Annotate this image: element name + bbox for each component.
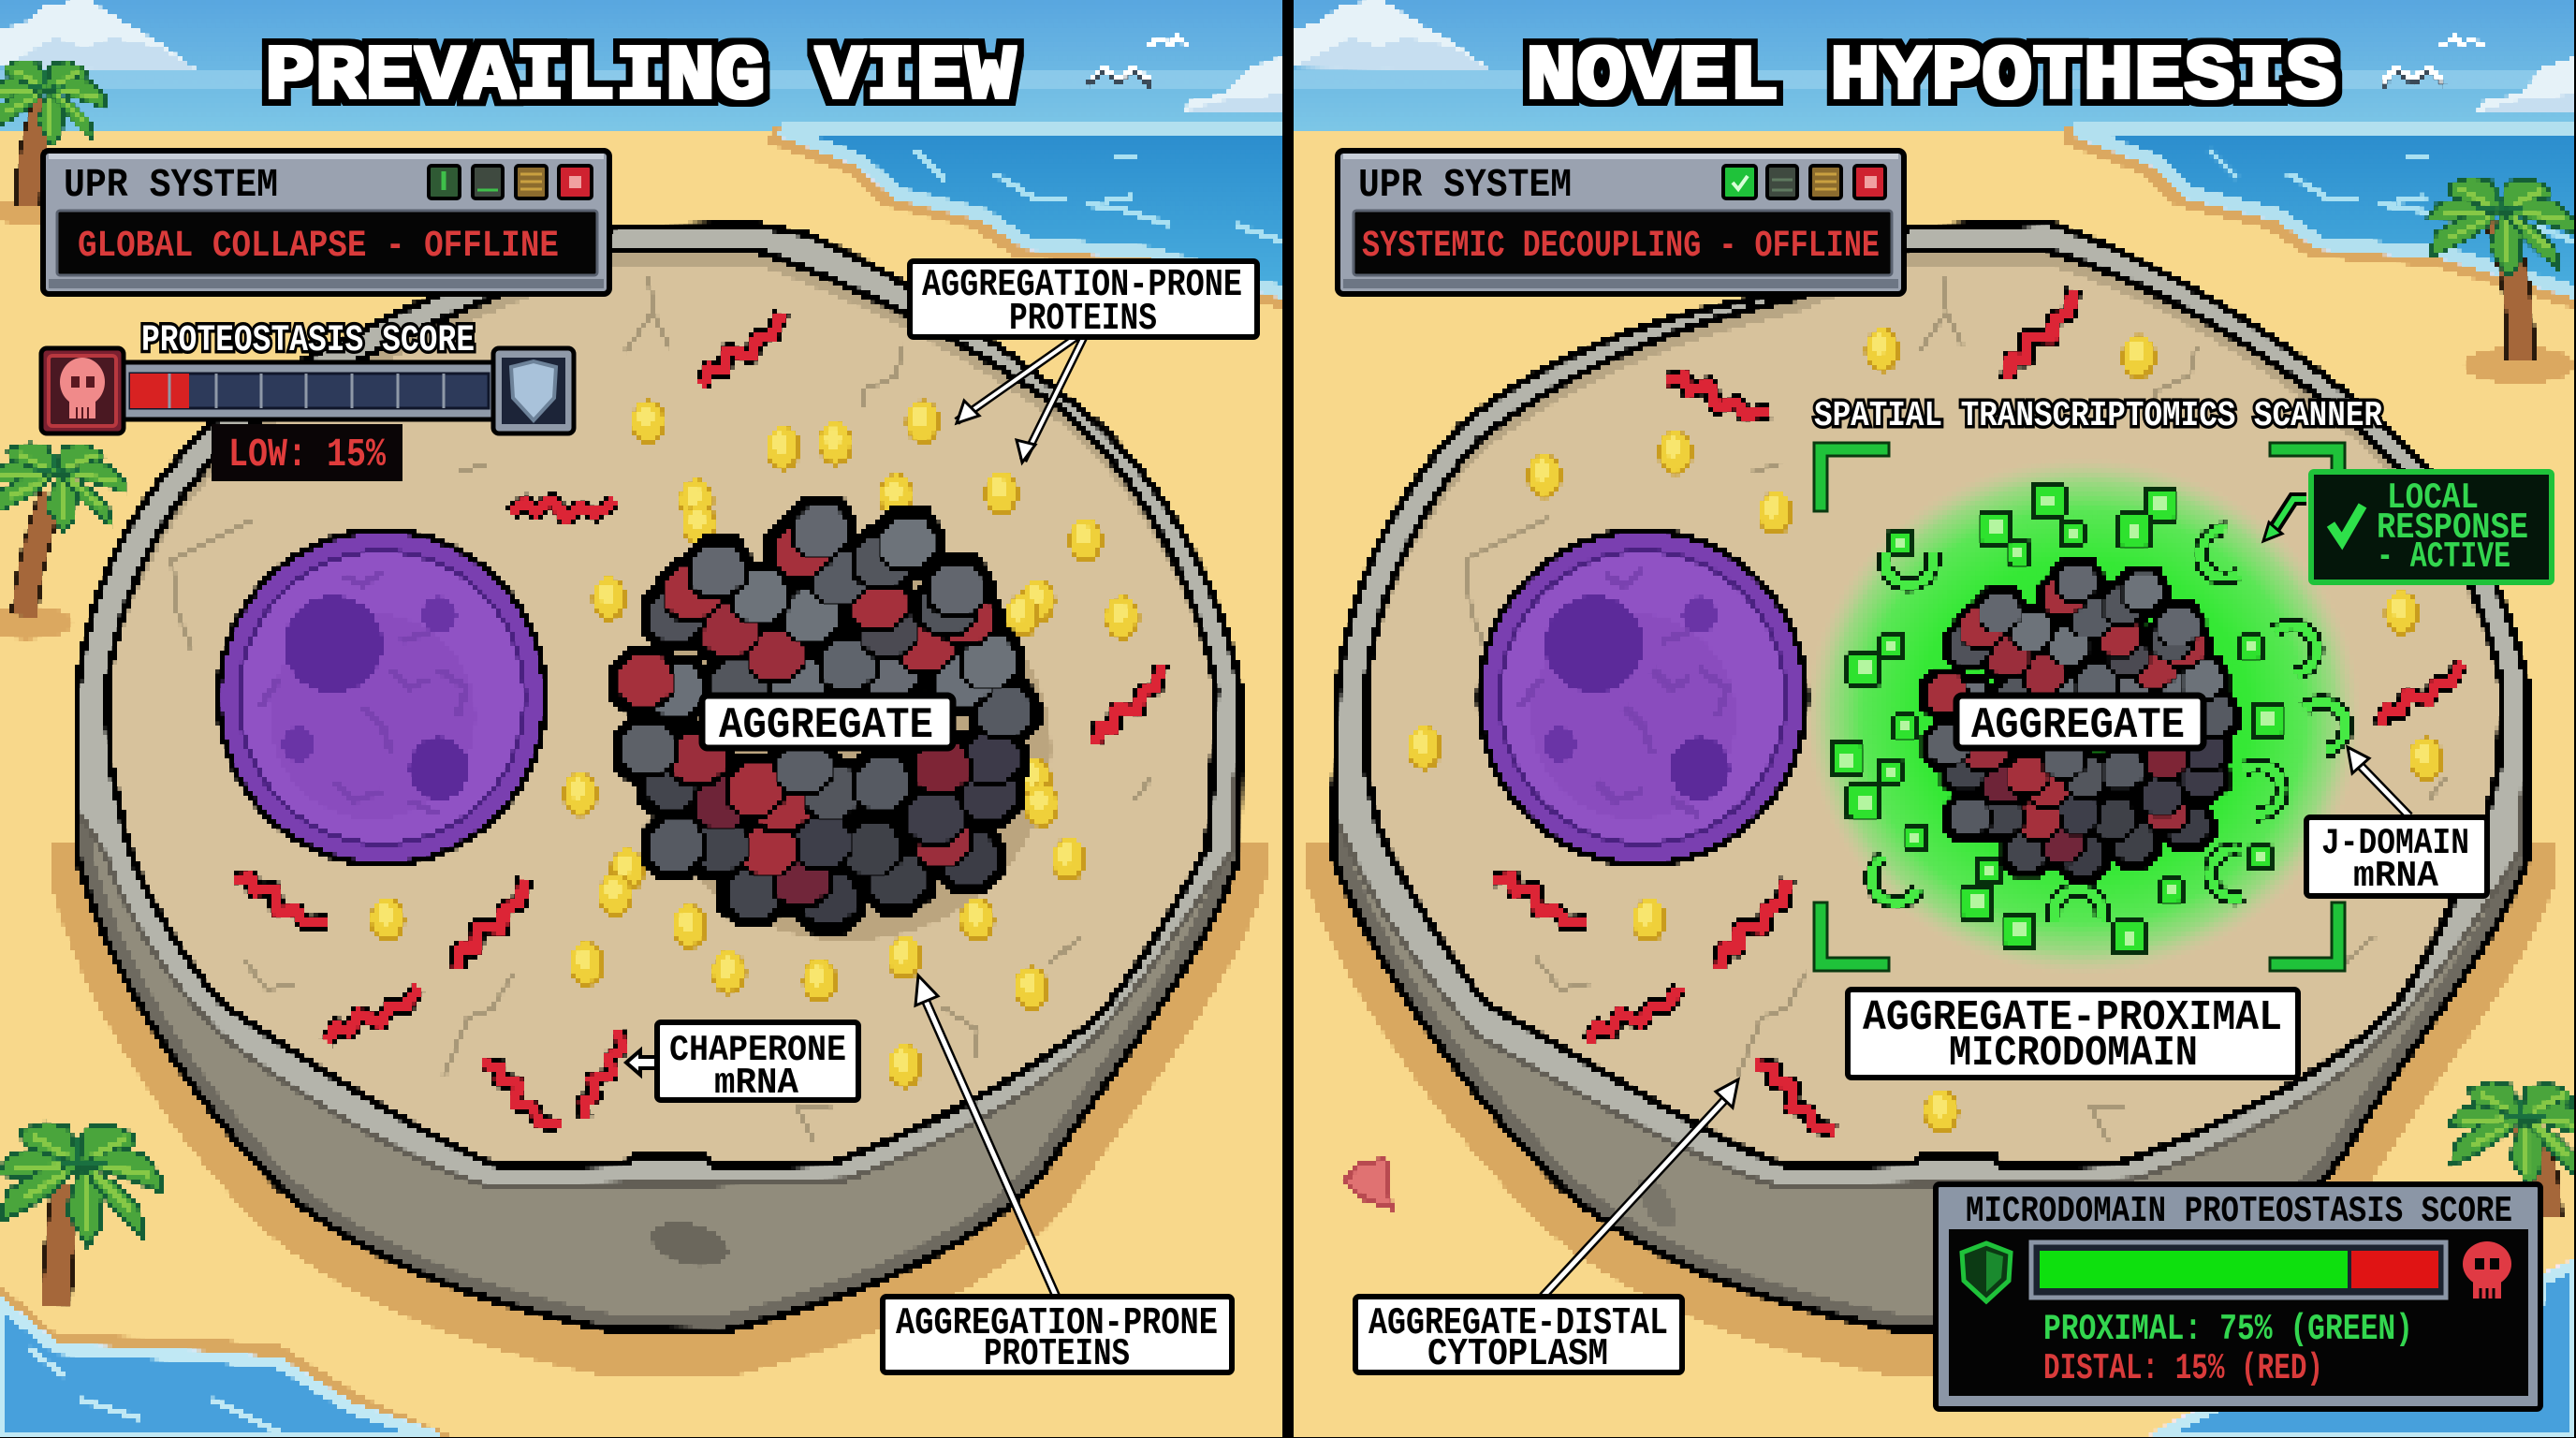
right cell: rock edge shading [1339,833,2523,1325]
callout: aggregate-distal cytoplasm: AGGREGATE-DISTAL [1368,1302,1668,1345]
right cell: cracks [1466,275,2445,1141]
right cell: cytoplasm highlight [1366,265,2502,1181]
left cell: rock edge shading [80,824,1236,1329]
callout: aggregation-prone proteins (top): AGGREGATION-PRONE [922,264,1242,307]
status message: SYSTEMIC DECOUPLING - OFFLINE [1362,226,1880,268]
icon: red skull [2463,1241,2511,1299]
callout: aggregate-proximal microdomain: MICRODOMAIN [1949,1030,2198,1078]
right UPR system panel [1338,151,1904,294]
palm tree middle left [0,443,127,639]
left cell: inner outline [107,250,1216,1167]
right cell: rock base [1333,223,2528,1331]
callout: aggregate-proximal microdomain [1848,990,2298,1078]
right cell: inner outline [1366,250,2502,1167]
callout: chaperone mRNA: CHAPERONE [669,1030,846,1071]
palm tree bottom left [0,1123,162,1308]
left cell: protein aggregate [618,505,1032,925]
callout: local response active: - ACTIVE [2377,536,2510,578]
icon: check mark [2331,506,2363,541]
left cell: crater on rock [647,1214,733,1274]
right cell: green local proteins [1831,484,2284,954]
heading: UPR SYSTEM [64,162,278,208]
callout: aggregation-prone proteins (bottom): AGGREGATION-PRONE [896,1302,1218,1345]
legend: distal: DISTAL: 15% (RED) [2043,1348,2323,1389]
right cell: sand shadow [1306,843,2555,1376]
right cell [1333,223,2528,1350]
icon: green shield [1962,1243,2011,1301]
proteostasis score gauge [41,320,574,481]
callout: aggregation-prone proteins (top) [910,261,1257,341]
gauge title: PROTEOSTASIS SCORE [141,320,475,362]
callout arrow: aggregation-prone proteins (bottom) [915,976,1056,1296]
right cell: green J-domain mRNA arcs [1872,523,2353,944]
left cell: outer outline [78,225,1240,1331]
arrow: local response to mRNA [2263,499,2306,541]
right cell: crater on rock [1632,1172,1682,1234]
status message: GLOBAL COLLAPSE - OFFLINE [78,226,559,268]
right cell: distal mRNA squiggles [1494,288,2470,1144]
palm tree top left [0,60,106,224]
callout: chaperone mRNA [657,1022,858,1104]
callout: aggregation-prone proteins (bottom): PROTEINS [984,1333,1130,1376]
right panel background: sky, sand and sea [1294,0,2576,1438]
left cell: aggregate shadow [643,557,1051,941]
score readout: LOW: 15% [228,432,386,477]
right cell: gray membrane rim [1333,223,2528,1187]
scanner corner brackets [1814,443,2345,971]
callout: aggregate-distal cytoplasm: CYTOPLASM [1427,1333,1608,1376]
coastal water bottom left [0,1284,459,1438]
left cell: sand shadow [51,843,1268,1376]
palm tree top right [2427,178,2576,384]
right cell: nucleus [1476,527,1809,868]
label: aggregate (left): AGGREGATE [719,701,933,750]
icon: red skull [41,348,124,433]
gauge bar [124,362,493,419]
score readout [212,424,402,481]
right cell: protein aggregate [1925,563,2234,876]
callout: local response active: RESPONSE [2377,507,2528,549]
left cell: cytoplasm surface [107,250,1216,1167]
right cell: distal proteins [1407,328,2444,1135]
red shell on the sand [1344,1159,1391,1208]
left cell: cytoplasm highlight [107,265,1216,1181]
callout: chaperone mRNA: mRNA [714,1063,799,1104]
callout: aggregate-proximal microdomain: AGGREGATE-PROXIMAL [1863,994,2282,1042]
left UPR system panel [43,151,609,294]
heading: UPR SYSTEM [1358,162,1572,208]
left cell: cracks [172,275,1151,1141]
arrow: chaperone mRNA [626,1050,659,1075]
left cell: proteins [370,400,1140,1089]
right cell: green proximal glow [1807,458,2361,975]
left cell: rock base [78,225,1240,1331]
callout arrow: J-domain mRNA [2348,747,2409,816]
palm tree bottom right [2448,1082,2576,1217]
left cell: gray membrane rim [78,225,1240,1187]
title: novel hypothesis: NOVEL HYPOTHESIS [1526,34,2336,121]
label: aggregate (right): AGGREGATE [1971,701,2185,750]
divider between panels [1282,0,1294,1438]
scanner label: SPATIAL TRANSCRIPTOMICS SCANNER [1814,396,2382,436]
icon: shield [493,348,574,433]
callout: aggregation-prone proteins (top): PROTEINS [1009,298,1157,341]
panel: microdomain proteostasis score [1936,1184,2540,1409]
left cell [78,225,1240,1350]
callout: J-domain mRNA [2306,817,2487,897]
status lights [429,166,592,198]
callout: local response active [2311,472,2552,582]
left cell: chaperone mRNA squiggles [233,313,1174,1138]
right cell: outer outline [1333,223,2528,1331]
dual bar [2031,1242,2446,1298]
callout: aggregation-prone proteins (bottom) [883,1297,1232,1376]
callout arrows: aggregation-prone proteins (top) [957,337,1084,462]
callout: local response active: LOCAL [2387,477,2479,519]
left cell: nucleus [215,527,549,868]
status lights [1723,166,1885,198]
callout: J-domain mRNA: J-DOMAIN [2321,823,2469,864]
legend: proximal: PROXIMAL: 75% (GREEN) [2043,1309,2413,1350]
coastal water bottom right [2153,1264,2576,1438]
callout: aggregate-distal cytoplasm [1355,1297,1682,1376]
right cell: cytoplasm surface [1366,250,2502,1167]
left panel background: sky, sand and sea [0,0,1288,1438]
title: prevailing view: PREVAILING VIEW [265,34,1017,121]
callout: J-domain mRNA: mRNA [2353,856,2439,897]
callout arrow: aggregate-distal cytoplasm [1543,1079,1738,1297]
